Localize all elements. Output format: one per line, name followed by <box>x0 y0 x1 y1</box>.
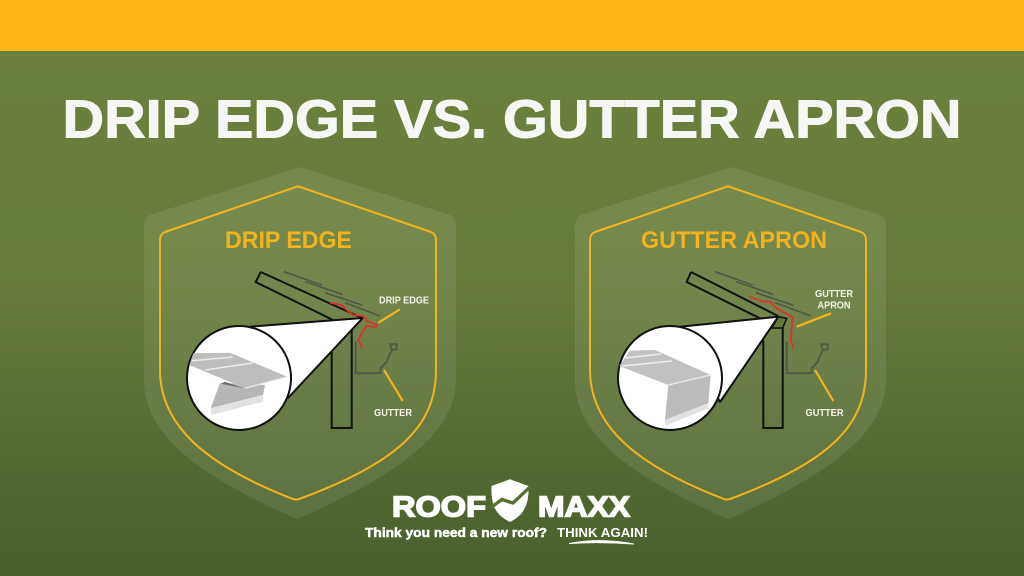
shield background <box>144 167 456 519</box>
shield yellow outline <box>590 186 866 500</box>
diagram: magnifier circle <box>187 326 291 430</box>
leader line: drip edge <box>378 309 400 323</box>
panel: gutter apron <box>575 167 886 519</box>
diagram: fascia end <box>772 317 787 328</box>
diagram: roof rafter <box>256 272 362 320</box>
diagram: gutter profile <box>356 342 397 373</box>
label: gutter apron <box>815 289 854 312</box>
diagram: shingles <box>284 272 380 316</box>
label: drip edge: DRIP EDGE <box>379 296 429 306</box>
tagline: Think you need a new roof? <box>365 525 547 540</box>
label: gutter apron: APRON <box>818 300 850 312</box>
title: DRIP EDGE VS. GUTTER APRON <box>62 90 961 150</box>
leader line: gutter <box>815 370 833 401</box>
diagram: red gutter apron profile <box>749 297 793 348</box>
diagram: roof rafter <box>687 272 778 318</box>
diagram: magnifier cone <box>250 318 363 398</box>
shield yellow outline <box>160 186 436 500</box>
top yellow band <box>0 0 1024 51</box>
diagram: magnifier cone <box>680 317 778 402</box>
tagline swoosh <box>569 541 634 544</box>
tagline emphasis: THINK AGAIN! <box>557 525 648 540</box>
logo: Roof Maxx <box>365 479 648 544</box>
shield background <box>575 167 886 519</box>
diagram: wall post <box>763 328 783 428</box>
logo wordmark: maxx: MAXX <box>538 491 631 523</box>
diagram: gutter apron close-up <box>619 350 711 426</box>
leader line: gutter <box>384 370 403 401</box>
diagram: gutter profile <box>787 342 828 373</box>
logo wordmark: roof: ROOF <box>392 491 486 523</box>
diagram: drip edge close-up <box>189 353 287 415</box>
diagram: shingles <box>715 272 811 316</box>
label: gutter: GUTTER <box>374 408 413 419</box>
diagram: wall post <box>332 330 352 428</box>
diagram: red drip edge profile <box>330 303 377 348</box>
label: gutter apron: GUTTER <box>815 289 854 300</box>
heading: DRIP EDGE <box>225 227 352 254</box>
heading: GUTTER APRON <box>641 227 827 254</box>
diagram: magnifier circle <box>618 326 722 430</box>
label: gutter: GUTTER <box>806 408 844 419</box>
leader line: gutter apron <box>797 313 831 327</box>
panel: drip edge <box>144 167 456 519</box>
logo icon: shield <box>490 479 530 522</box>
